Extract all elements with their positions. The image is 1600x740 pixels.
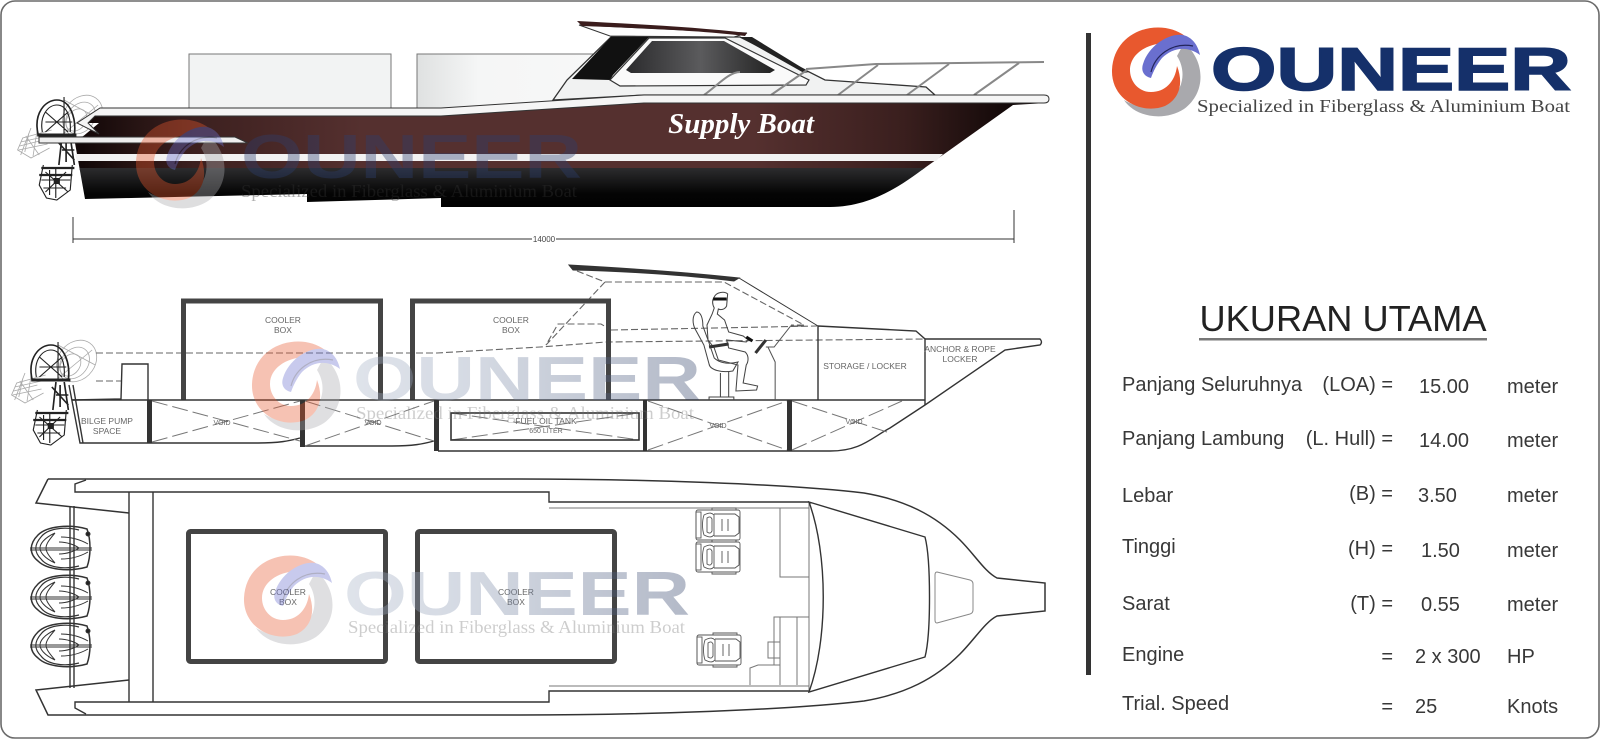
cooler labels plan: BOX — [279, 597, 297, 607]
watermark: plan view: Specialized in Fiberglass & Aluminium Boat — [348, 617, 685, 637]
row: engine: Engine — [1122, 644, 1184, 666]
length dimension line — [73, 210, 1014, 244]
watermark: profile view: OUNEER — [241, 123, 582, 192]
row: engine: 2 x 300 — [1415, 646, 1481, 668]
compartment labels: STORAGE / LOCKER — [823, 361, 907, 371]
watermark: profile view — [136, 119, 582, 208]
watermark: plan view — [244, 555, 690, 644]
row: height: 1.50 — [1421, 540, 1460, 562]
compartment labels: SPACE — [93, 426, 121, 436]
row: height: Tinggi — [1122, 536, 1176, 558]
foredeck and windscreen — [809, 502, 930, 692]
row: draft — [1122, 593, 1558, 616]
fuel tank — [451, 413, 639, 440]
helm seat and helmsman — [693, 292, 758, 400]
side profile view: exterior — [18, 21, 1060, 210]
row: hull length: Panjang Lambung — [1122, 428, 1284, 450]
row: speed: Trial. Speed — [1122, 693, 1229, 715]
cooler labels — [265, 315, 529, 335]
cooler box 1 section — [184, 301, 380, 400]
logo tagline: Specialized in Fiberglass & Aluminium Boat — [1197, 96, 1570, 116]
row: LOA: Panjang Seluruhnya — [1122, 374, 1303, 396]
cooler box 1 plan — [188, 532, 386, 662]
watermark: section view: Specialized in Fiberglass & Aluminium Boat — [356, 403, 694, 423]
specifications table — [1122, 374, 1558, 718]
cooler labels: COOLER — [265, 315, 301, 325]
cooler labels plan: COOLER — [270, 587, 306, 597]
compartment labels: VOID — [364, 420, 382, 427]
compartment labels: FUEL OIL TANK — [515, 416, 577, 426]
cooler box 2 plan — [418, 532, 614, 662]
row: hull length: meter — [1507, 430, 1558, 452]
cabin and hardtop — [553, 21, 935, 100]
compartment labels: LOCKER — [943, 354, 977, 364]
row: speed: = — [1381, 696, 1393, 718]
row: LOA: (LOA) = — [1322, 374, 1393, 396]
row: engine: = — [1381, 646, 1393, 668]
cooler labels: BOX — [502, 325, 520, 335]
row: height: (H) = — [1348, 538, 1393, 560]
watermark: plan view: OUNEER — [344, 560, 690, 629]
row: hull length: 14.00 — [1419, 430, 1469, 452]
side section view: interior layout — [12, 265, 1041, 451]
row: height: meter — [1507, 540, 1558, 562]
compartment labels: 650 LITER — [529, 428, 563, 435]
plan view: top deck layout — [30, 479, 1045, 715]
cooler labels plan — [270, 587, 534, 607]
compartment labels — [81, 344, 996, 436]
company logo — [1112, 27, 1571, 116]
bow railing — [704, 62, 1044, 95]
watermark: section view — [252, 341, 701, 430]
row: engine — [1122, 644, 1535, 668]
seats — [696, 508, 741, 667]
hull — [75, 103, 1046, 207]
row: speed — [1122, 693, 1558, 718]
length dimension line: 14000 — [533, 235, 556, 244]
logo wordmark: OUNEER — [1211, 36, 1571, 103]
row: speed: 25 — [1415, 696, 1437, 718]
row: draft: meter — [1507, 594, 1558, 616]
row: speed: Knots — [1507, 696, 1558, 718]
row: hull length: (L. Hull) = — [1306, 428, 1393, 450]
row: hull length — [1122, 428, 1558, 452]
row: beam: (B) = — [1349, 483, 1393, 505]
compartment labels: ANCHOR & ROPE — [924, 344, 996, 354]
compartment labels: VOID — [213, 420, 231, 427]
row: LOA — [1122, 374, 1558, 398]
row: draft: 0.55 — [1421, 594, 1460, 616]
watermark: profile view: Specialized in Fiberglass & Aluminium Boat — [241, 181, 577, 201]
row: beam: Lebar — [1122, 485, 1173, 507]
cooler box 2 section — [412, 301, 608, 400]
cooler labels: COOLER — [493, 315, 529, 325]
outboard engine — [18, 88, 111, 200]
specifications heading: UKURAN UTAMA — [1200, 298, 1486, 339]
vertical divider — [1086, 33, 1091, 675]
helm console and wheel — [756, 326, 804, 400]
outboard engine section — [12, 333, 105, 445]
compartment labels: VOID — [709, 423, 727, 430]
cooler boxes exterior — [189, 54, 622, 109]
dashed superstructure — [96, 265, 925, 381]
compartment labels: BILGE PUMP — [81, 416, 133, 426]
row: engine: HP — [1507, 646, 1535, 668]
hull plan outline — [36, 479, 1045, 715]
hull section outline — [69, 326, 1042, 451]
void compartment crosses — [152, 401, 902, 450]
cooler labels plan: COOLER — [498, 587, 534, 597]
logo mark — [1112, 27, 1201, 116]
row: height — [1122, 536, 1558, 562]
gunwale and deck lines — [70, 480, 809, 714]
row: draft: (T) = — [1350, 593, 1393, 615]
row: beam: meter — [1507, 485, 1558, 507]
boat name: Supply Boat — [668, 108, 815, 140]
cooler labels: BOX — [274, 325, 292, 335]
transom strip — [39, 137, 248, 143]
cooler labels plan: BOX — [507, 597, 525, 607]
hull stripe — [75, 154, 943, 161]
watermark: section view: OUNEER — [353, 345, 701, 414]
engines plan — [30, 526, 92, 667]
console and steps — [750, 508, 809, 685]
deck sheer strip — [77, 95, 1049, 134]
anchor hatch — [935, 572, 973, 623]
compartment labels: VOID — [845, 419, 863, 426]
row: LOA: meter — [1507, 376, 1558, 398]
row: beam: 3.50 — [1418, 485, 1457, 507]
row: draft: Sarat — [1122, 593, 1170, 615]
row: beam — [1122, 483, 1558, 507]
row: LOA: 15.00 — [1419, 376, 1469, 398]
